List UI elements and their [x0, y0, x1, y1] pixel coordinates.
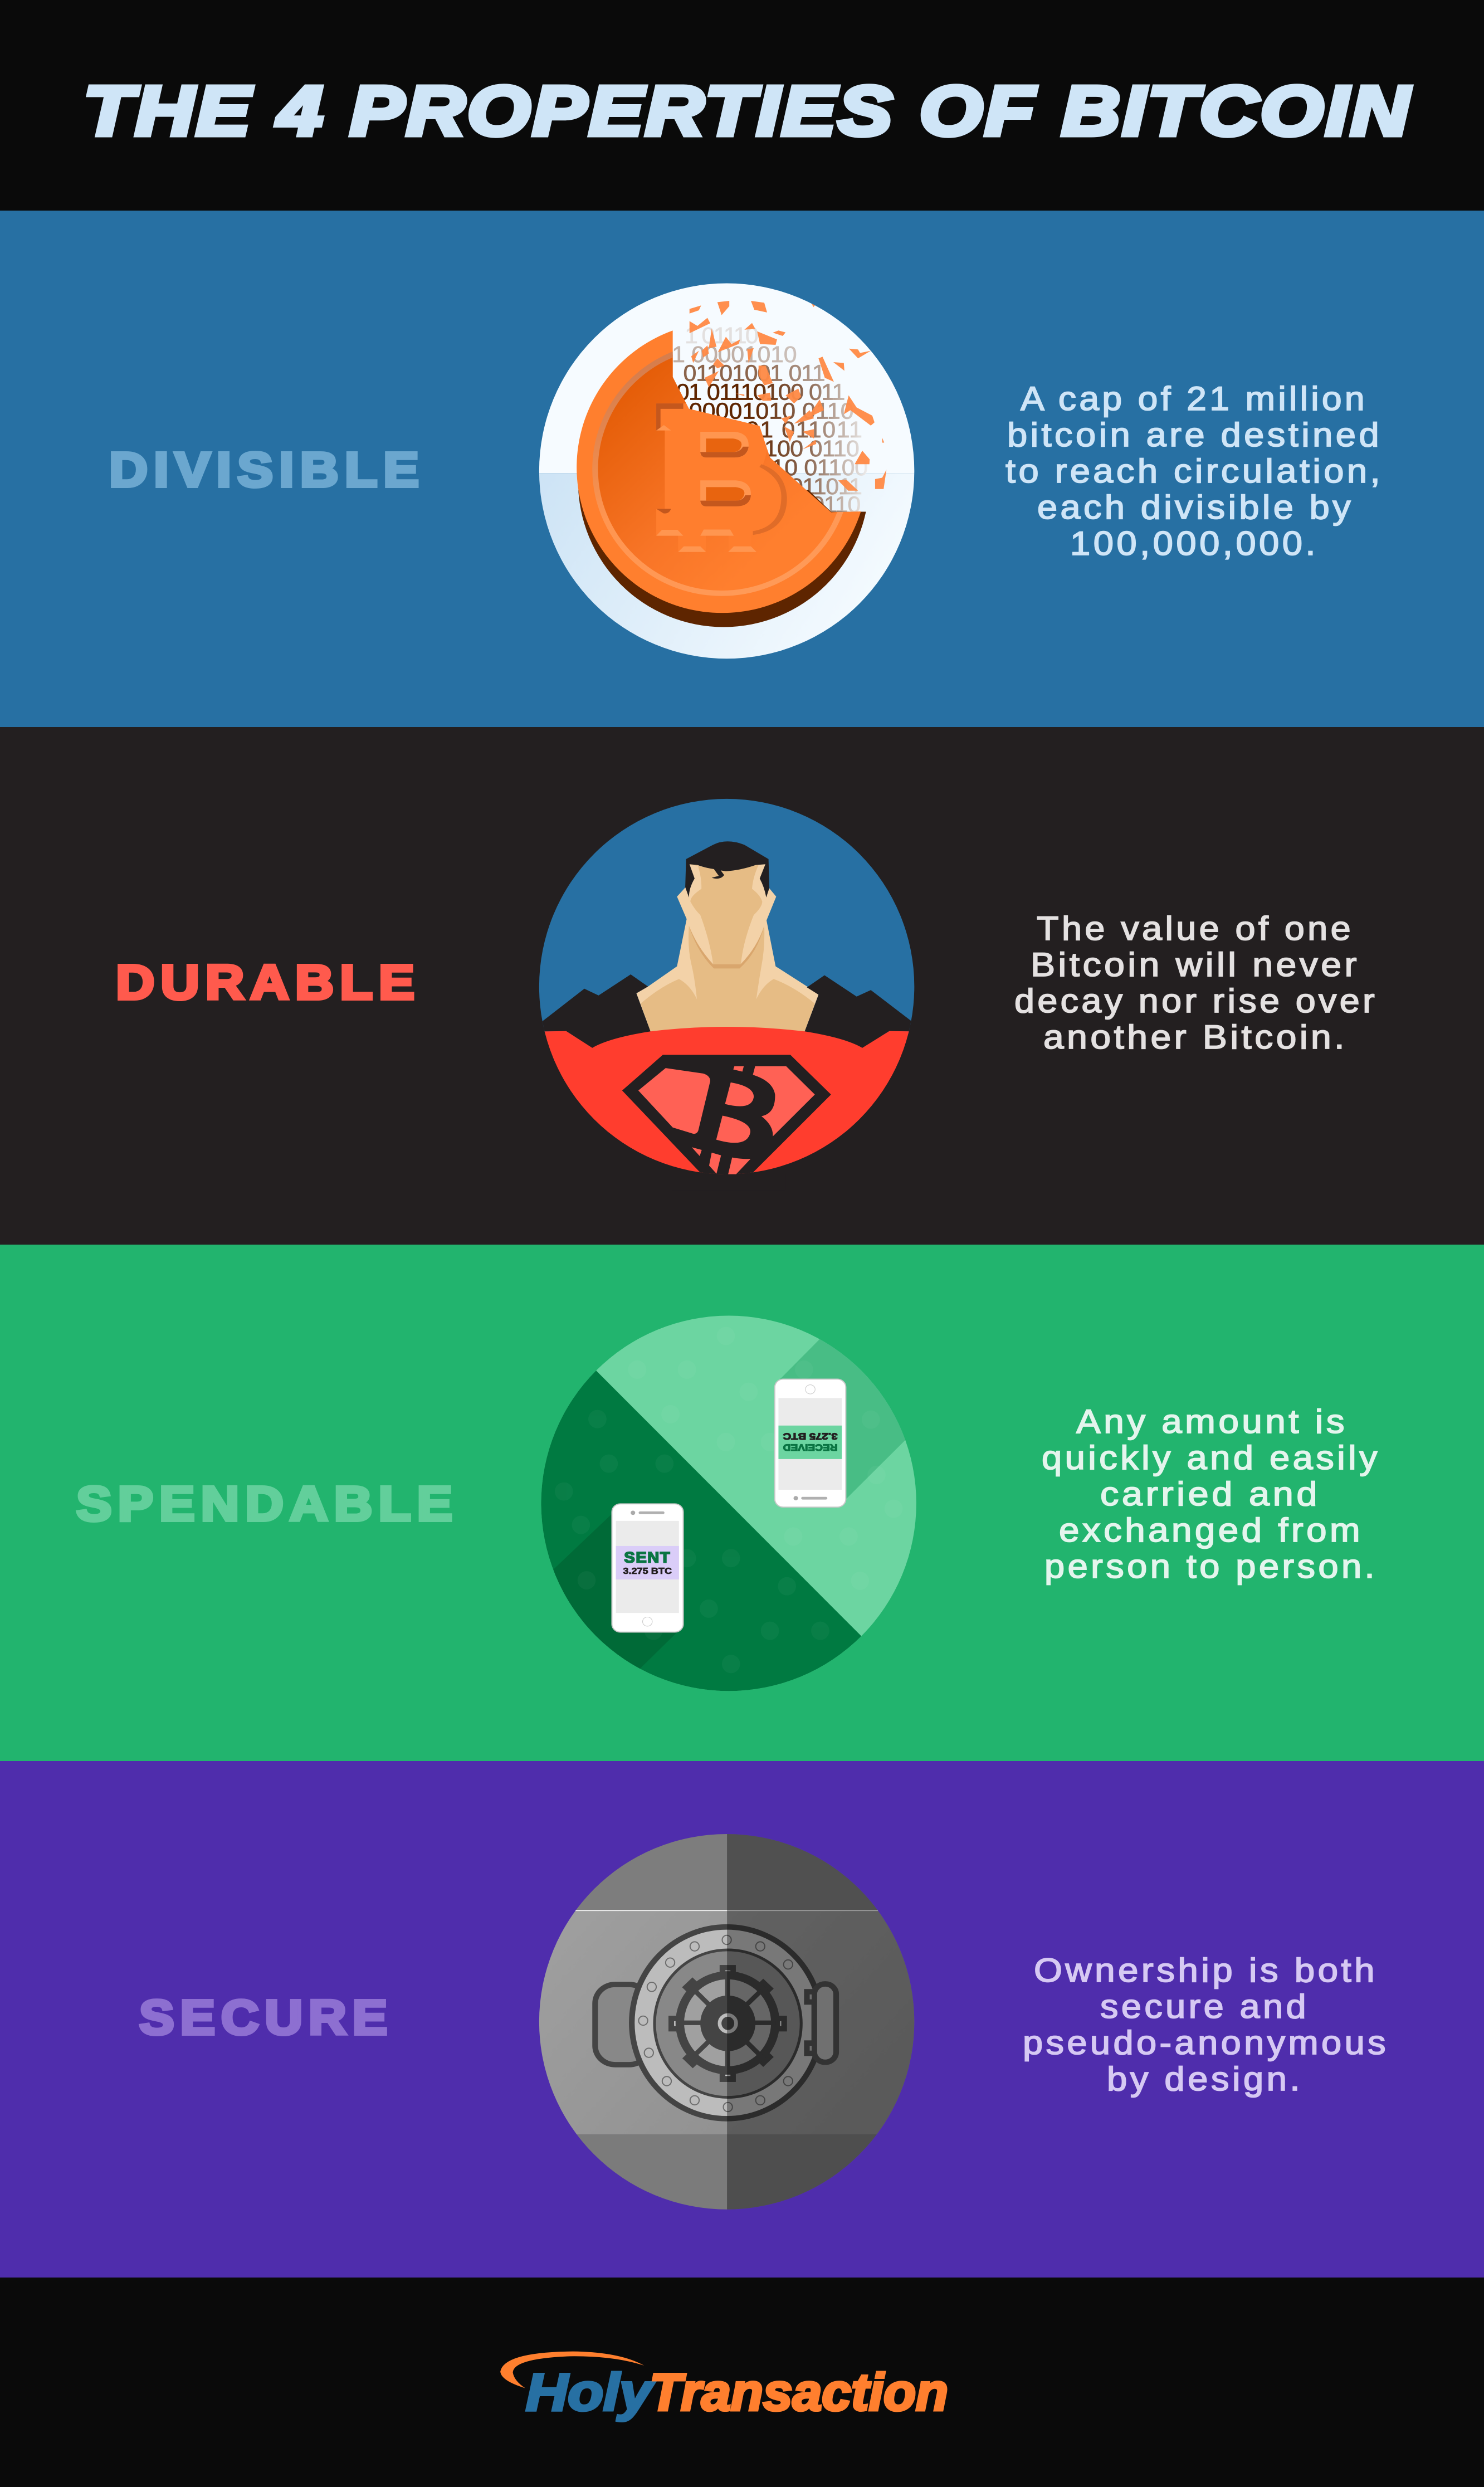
description: secure: by design.	[1107, 2060, 1303, 2098]
description: secure: secure and	[1100, 1988, 1309, 2025]
phone: sent: 3.275 BTC	[623, 1566, 672, 1576]
description: durable: decay nor rise over	[1014, 982, 1378, 1020]
logo: HolyTransaction: Transaction	[650, 2363, 948, 2421]
description: durable: another Bitcoin.	[1043, 1018, 1348, 1056]
description: secure	[1023, 1952, 1389, 2098]
description: divisible: to reach circulation,	[1005, 452, 1383, 490]
description: divisible: A cap of 21 million	[1021, 380, 1368, 417]
hair	[685, 841, 769, 898]
description: durable	[1014, 910, 1378, 1056]
description: secure: Ownership is both	[1034, 1952, 1378, 1989]
decorative dots	[555, 1327, 902, 1673]
bitcoin emblem	[638, 1066, 815, 1174]
heading: spendable: SPENDABLE	[76, 1477, 458, 1531]
wheel ring	[680, 1975, 775, 2070]
icon: shattering bitcoin coin	[530, 278, 928, 667]
title: THE 4 PROPERTIES OF BITCOIN	[84, 72, 1412, 150]
description: spendable: carried and	[1100, 1475, 1320, 1513]
heading: secure: SECURE	[139, 1991, 393, 2045]
description: divisible: each divisible by	[1037, 489, 1354, 526]
vault door ring	[632, 1927, 822, 2119]
vault handle left	[595, 1984, 649, 2065]
description: spendable	[1042, 1403, 1380, 1585]
panel: durable	[0, 727, 1484, 1245]
phone: sent: SENT	[624, 1549, 671, 1566]
panel: spendable	[0, 1245, 1484, 1761]
icon: shattering bitcoin coin: 1 00001010	[672, 342, 797, 367]
icon: bitcoin superhero	[539, 799, 915, 1174]
inner door	[655, 1950, 801, 2098]
description: secure: pseudo-anonymous	[1023, 2024, 1389, 2061]
icon: shattering bitcoin coin: 01 01110100 011	[676, 379, 845, 404]
coin edge shadow	[578, 490, 866, 627]
description: durable: Bitcoin will never	[1031, 946, 1360, 983]
wheel hub	[700, 1996, 755, 2051]
phone: received: 3.275 BTC	[783, 1431, 838, 1442]
door bolts	[638, 1935, 793, 2111]
shield emblem	[622, 1055, 831, 1185]
description: spendable: quickly and easily	[1042, 1439, 1380, 1476]
coin face	[577, 330, 861, 613]
description: durable: The value of one	[1037, 910, 1354, 947]
icon: shattering bitcoin coin: 011011	[790, 474, 862, 499]
icon: shattering bitcoin coin: 1 01110	[685, 323, 759, 348]
icon: bank vault door	[530, 1825, 931, 2221]
phone: received: RECEIVED	[783, 1442, 838, 1453]
icon: shattering bitcoin coin: 01 011011	[746, 417, 862, 442]
description: divisible: 100,000,000.	[1070, 525, 1319, 562]
right half shading	[727, 1825, 931, 2221]
phone: received	[775, 1379, 846, 1507]
panel: secure	[0, 1761, 1484, 2278]
logo: HolyTransaction: Holy	[526, 2363, 655, 2421]
heading: divisible: DIVISIBLE	[109, 443, 425, 497]
icon: shattering bitcoin coin: 0110	[811, 491, 861, 517]
wheel spokes	[680, 1976, 775, 2070]
wheel lugs	[668, 1965, 787, 2082]
vault hinge right	[804, 1984, 836, 2062]
description: spendable: exchanged from	[1059, 1511, 1363, 1549]
header band	[0, 0, 1484, 211]
description: spendable: Any amount is	[1076, 1403, 1348, 1440]
description: spendable: person to person.	[1044, 1548, 1378, 1585]
icon: shattering bitcoin coin: 100 0110	[764, 436, 860, 461]
icon: two phones exchanging bitcoin	[530, 1306, 956, 1703]
icon: shattering bitcoin coin: 00001010 0110	[689, 398, 854, 423]
description: divisible: bitcoin are destined	[1007, 416, 1382, 453]
description: divisible	[1005, 380, 1383, 562]
icon: shattering bitcoin coin: 10 01100	[772, 455, 868, 480]
phone: sent	[612, 1504, 684, 1632]
heading: durable: DURABLE	[116, 955, 421, 1010]
logo: HolyTransaction	[500, 2352, 948, 2421]
footer band	[0, 2278, 1484, 2487]
hero shoulders and neck	[636, 864, 818, 1032]
icon: shattering bitcoin coin: 01101001 011	[684, 360, 826, 386]
panel: divisible	[0, 211, 1484, 727]
cape	[543, 974, 651, 1036]
flying coin fragments	[690, 301, 886, 491]
